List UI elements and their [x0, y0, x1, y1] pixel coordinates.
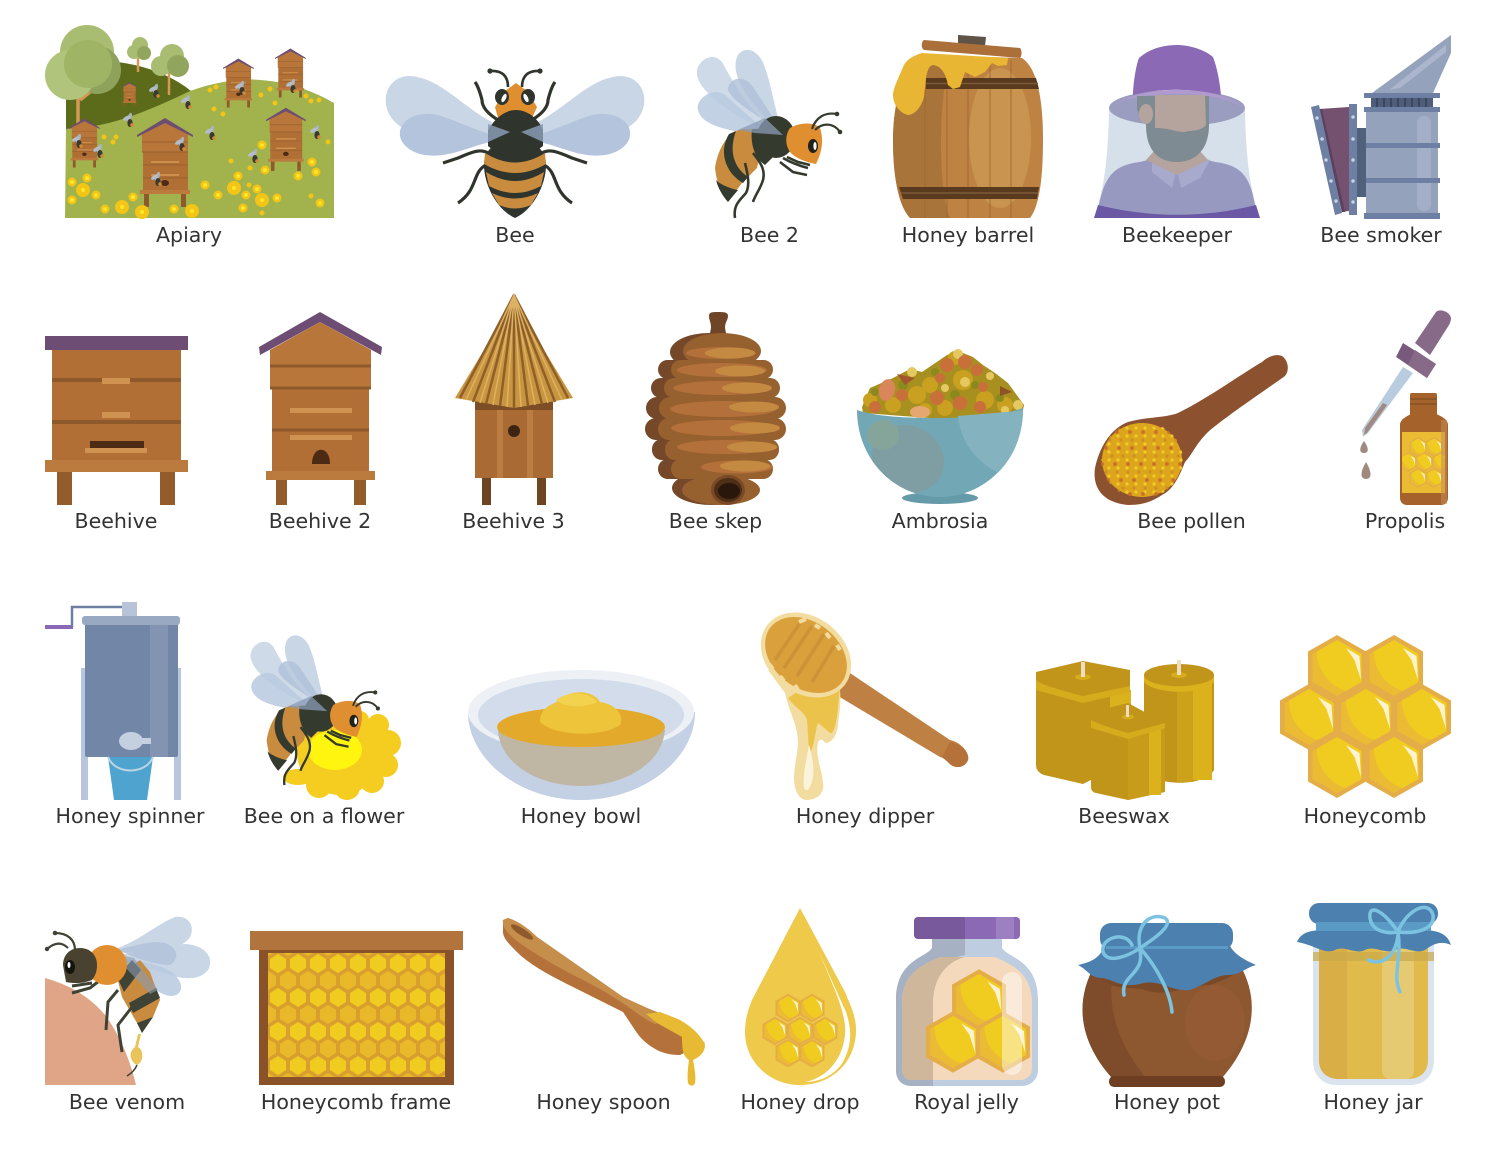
item: Honey drop	[740, 908, 860, 1114]
item: Royal jelly	[896, 917, 1038, 1114]
item: Propolis	[1360, 310, 1451, 533]
icon: bee stinging skin	[45, 917, 210, 1085]
icon: propolis bottle and dropper	[1360, 310, 1451, 505]
item: Honey bowl	[468, 670, 695, 828]
label: Honey dipper	[796, 804, 935, 828]
label: Bee pollen	[1137, 509, 1246, 533]
icon: honey spinner	[45, 602, 181, 800]
label: Bee	[495, 223, 535, 247]
icon: bee side view	[697, 50, 842, 218]
label: Beekeeper	[1122, 223, 1233, 247]
item: Honeycomb	[1280, 635, 1451, 828]
label: Honey spoon	[536, 1090, 671, 1114]
label: Honey spinner	[56, 804, 205, 828]
item: Beeswax	[1036, 660, 1214, 828]
item: Honey spoon	[503, 918, 705, 1114]
icon: bee	[386, 68, 644, 218]
icon: beeswax candles	[1036, 660, 1214, 800]
item: Honey barrel	[893, 35, 1043, 247]
icon: honeycomb	[1280, 635, 1451, 798]
icon: honey bowl	[468, 670, 695, 800]
item: Honey jar	[1297, 903, 1451, 1114]
label: Apiary	[156, 223, 222, 247]
item: Beehive 3	[455, 293, 573, 533]
item: Ambrosia	[857, 349, 1030, 533]
icon: beehive 2	[259, 312, 382, 505]
icon: bowl of ambrosia	[857, 349, 1030, 506]
item: Beehive	[45, 336, 188, 533]
label: Bee on a flower	[244, 804, 405, 828]
icon: beehive	[45, 336, 188, 505]
item: Bee	[386, 68, 644, 247]
label: Propolis	[1365, 509, 1445, 533]
item: Beekeeper	[1094, 45, 1260, 247]
label: Beehive	[75, 509, 157, 533]
label: Ambrosia	[892, 509, 988, 533]
icon: bee on flower	[250, 635, 401, 800]
item: Honey pot	[1078, 917, 1256, 1114]
icon: barrel	[893, 35, 1043, 218]
icon: beekeeper	[1094, 45, 1260, 218]
icon: spoon with pollen	[1095, 355, 1288, 505]
icon: apiary	[45, 25, 334, 218]
label: Beehive 2	[269, 509, 371, 533]
icon: honeycomb frame	[250, 931, 463, 1085]
item: Beehive 2	[259, 312, 382, 533]
item: Apiary	[45, 25, 334, 247]
label: Bee skep	[669, 509, 762, 533]
icon: honey pot	[1078, 917, 1256, 1087]
label: Bee venom	[69, 1090, 185, 1114]
item: Honey spinner	[45, 602, 205, 828]
label: Bee 2	[740, 223, 799, 247]
item: Bee venom	[45, 917, 210, 1114]
label: Beeswax	[1078, 804, 1170, 828]
item: Bee smoker	[1311, 35, 1451, 247]
item: Honey dipper	[744, 595, 968, 828]
item: Bee pollen	[1095, 355, 1288, 533]
icon: honey drop	[745, 908, 856, 1085]
icon: thatched beehive	[455, 293, 573, 505]
label: Honey barrel	[902, 223, 1034, 247]
label: Honey drop	[740, 1090, 860, 1114]
item: Bee on a flower	[244, 635, 405, 828]
label: Honey jar	[1323, 1090, 1423, 1114]
label: Bee smoker	[1320, 223, 1442, 247]
label: Beehive 3	[462, 509, 565, 533]
icon: smoker	[1311, 35, 1451, 219]
item: Honeycomb frame	[250, 931, 463, 1114]
icon: honey spoon	[503, 918, 705, 1086]
icon: honey jar	[1297, 903, 1451, 1085]
label: Honeycomb	[1304, 804, 1426, 828]
icon: bee skep	[645, 312, 786, 505]
label: Honey bowl	[521, 804, 641, 828]
item: Bee skep	[645, 312, 786, 533]
icon: honey dipper	[744, 595, 968, 800]
label: Honey pot	[1114, 1090, 1220, 1114]
icon: royal jelly jar	[896, 917, 1038, 1086]
label: Honeycomb frame	[261, 1090, 451, 1114]
label: Royal jelly	[914, 1090, 1019, 1114]
item: Bee 2	[697, 50, 842, 247]
